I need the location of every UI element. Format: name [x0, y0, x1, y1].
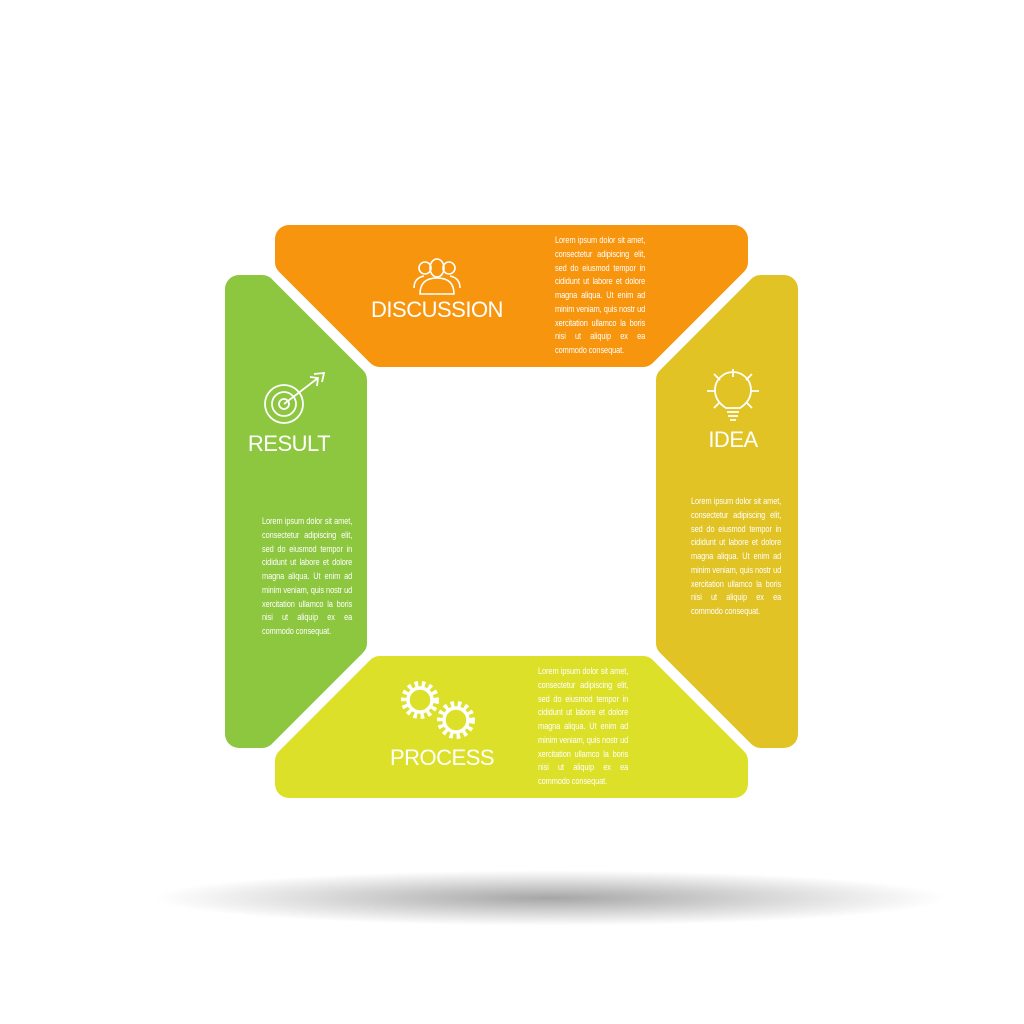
panel: result	[239, 289, 353, 734]
icon: people	[414, 259, 460, 294]
text: discussion: Lorem ipsum dolor sit amet, consectetur adipiscing elit, sed do eiusmod tempor in cididunt ut labore et dolore magna aliqua. Ut enim ad minim veniam, quis nostr ud xercitation ullamco la boris nisi ut aliquip ex ea commodo consequat.	[555, 235, 645, 355]
text: idea: Lorem ipsum dolor sit amet, consectetur adipiscing elit, sed do eiusmod tempor in cididunt ut labore et dolore magna aliqua. Ut enim ad minim veniam, quis nostr ud xercitation ullamco la boris nisi ut aliquip ex ea commodo consequat.	[691, 496, 781, 616]
panel: process	[289, 670, 734, 784]
shadow	[150, 870, 950, 926]
icon: bulb	[707, 369, 759, 420]
heading: result: RESULT	[248, 431, 330, 456]
text: result: Lorem ipsum dolor sit amet, consectetur adipiscing elit, sed do eiusmod tempor in cididunt ut labore et dolore magna aliqua. Ut enim ad minim veniam, quis nostr ud xercitation ullamco la boris nisi ut aliquip ex ea commodo consequat.	[262, 516, 352, 636]
panel: idea	[670, 289, 784, 734]
text: process: Lorem ipsum dolor sit amet, consectetur adipiscing elit, sed do eiusmod tempor in cididunt ut labore et dolore magna aliqua. Ut enim ad minim veniam, quis nostr ud xercitation ullamco la boris nisi ut aliquip ex ea commodo consequat.	[538, 666, 628, 786]
heading: process: PROCESS	[390, 745, 494, 770]
icon: gears	[404, 684, 472, 736]
heading: discussion: DISCUSSION	[371, 297, 503, 322]
icon: target	[265, 373, 324, 423]
heading: idea: IDEA	[708, 427, 758, 452]
panel: discussion	[289, 239, 734, 353]
